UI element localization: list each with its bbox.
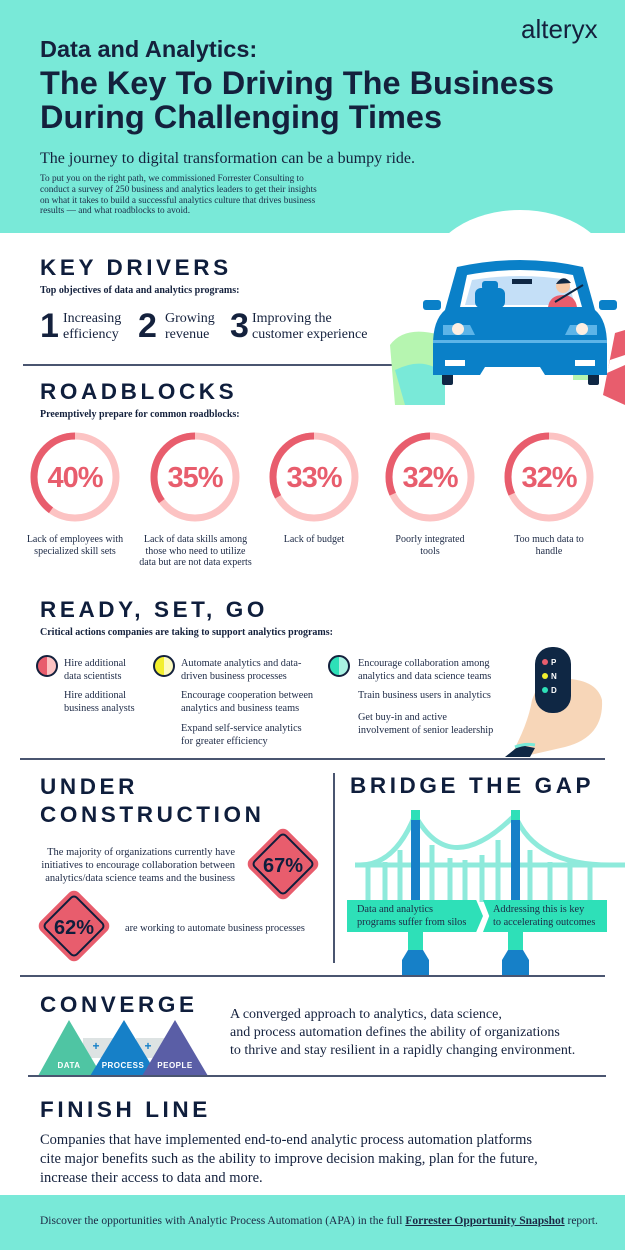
finish line text: cite major benefits such as the ability to improve decision making, plan for the future, (40, 1151, 538, 1167)
footer: Discover the opportunities with Analytic Process Automation (APA) in the full Forrester Opportunity Snapshot report. (40, 1215, 598, 1227)
title: Data and Analytics: (40, 36, 257, 62)
donut 32% b (508, 436, 590, 518)
text: 67% stat: The majority of organizations currently have initiatives to encourage collaboration between analytics/data science teams and the business (41, 847, 235, 884)
subheading: Top objectives of data and analytics programs: (40, 285, 239, 296)
intro text: To put you on the right path, we commissioned Forrester Consulting to (40, 174, 304, 184)
donut 33% (273, 436, 355, 518)
donut charts: 40% (47, 462, 104, 494)
actions column 2: Automate analytics and data- (181, 658, 301, 669)
intro text: conduct a survey of 250 business and analytics leaders to get their insights (40, 185, 317, 195)
finish line text (40, 1132, 538, 1186)
footer (0, 1195, 625, 1250)
heading: under construction: UNDER (40, 774, 138, 799)
decorative white bump (430, 210, 610, 330)
actions column 1: Hire additional (64, 690, 126, 701)
converge triangles: + (92, 1039, 100, 1053)
bridge label 1: programs suffer from silos (357, 917, 466, 928)
actions column 1: Hire additional (64, 658, 126, 669)
icon: hand with gear shifter (505, 647, 602, 757)
actions column 1: data scientists (64, 671, 121, 682)
subheading: Critical actions companies are taking to support analytics programs: (40, 627, 333, 638)
drivers list (40, 307, 367, 345)
title (40, 36, 554, 135)
roadblock labels: Too much data to handle (514, 534, 584, 556)
finish line text: Companies that have implemented end-to-end analytic process automation platforms (40, 1132, 532, 1148)
illustration: car (390, 260, 625, 405)
icon: hand with gear shifter: N (551, 672, 557, 681)
icon: hand with gear shifter: P (551, 658, 557, 667)
donut 35% (154, 436, 236, 518)
roadblock labels (27, 534, 584, 568)
actions column 3: involvement of senior leadership (358, 725, 493, 736)
title: During Challenging Times (40, 99, 442, 135)
actions column 2: driven business processes (181, 671, 287, 682)
heading: ready set go: READY, SET, GO (40, 597, 268, 622)
heading: converge: CONVERGE (40, 992, 198, 1017)
actions column 2 (153, 655, 313, 747)
drivers list: Growing (165, 311, 215, 326)
donut charts: 32% (402, 462, 459, 494)
actions column 3: analytics and data science teams (358, 671, 491, 682)
drivers list: 2 (138, 307, 157, 345)
converge triangles: PEOPLE (157, 1061, 193, 1070)
drivers list: 3 (230, 307, 249, 345)
intro text (40, 150, 415, 216)
actions column 3: Get buy-in and active (358, 712, 447, 723)
converge text: A converged approach to analytics, data science, (230, 1007, 502, 1022)
roadblock labels: Poorly integrated tools (395, 534, 465, 556)
actions column 2: analytics and business teams (181, 703, 299, 714)
bridge label 1: Data and analytics (357, 904, 433, 915)
intro text: on what it takes to build a successful analytics culture that drives business (40, 196, 315, 206)
converge text (230, 1007, 575, 1058)
text: 62% stat: are working to automate business processes (125, 923, 305, 934)
actions column 3 (328, 655, 493, 736)
converge text: to thrive and stay resilient in a rapidly changing environment. (230, 1043, 575, 1058)
converge triangles: PROCESS (102, 1061, 144, 1070)
diamond 67%: 67% (263, 855, 303, 877)
converge triangles: DATA (57, 1061, 81, 1070)
title: The Key To Driving The Business (40, 65, 554, 101)
bridge label 2: Addressing this is key (493, 904, 584, 915)
bridge label 2: to accelerating outcomes (493, 917, 595, 928)
actions column 1: business analysts (64, 703, 135, 714)
heading: key drivers: KEY DRIVERS (40, 255, 232, 280)
drivers list: customer experience (252, 327, 367, 342)
bridge label 1 (347, 900, 483, 932)
donut 32% (389, 436, 471, 518)
logo: alteryx (521, 14, 598, 44)
actions column 2: for greater efficiency (181, 736, 268, 747)
converge triangles: + (144, 1039, 152, 1053)
drivers list: revenue (165, 327, 209, 342)
converge text: and process automation defines the ability of organizations (230, 1025, 560, 1040)
actions column 2: Expand self-service analytics (181, 723, 302, 734)
drivers list: Increasing (63, 311, 121, 326)
drivers list: efficiency (63, 327, 119, 342)
roadblock labels: Lack of budget (284, 534, 344, 545)
donut charts: 35% (167, 462, 224, 494)
bridge illustration (355, 810, 625, 975)
donut charts: 32% (521, 462, 578, 494)
finish line text: increase their access to data and more. (40, 1170, 263, 1186)
heading: bridge the gap: BRIDGE THE GAP (350, 773, 594, 798)
roadblock labels: Lack of data skills among those who need to utilize data but are not data experts (139, 534, 252, 568)
heading: roadblocks: ROADBLOCKS (40, 379, 237, 404)
actions column 3: Train business users in analytics (358, 690, 491, 701)
intro text: The journey to digital transformation can be a bumpy ride. (40, 150, 415, 167)
donut 40% (34, 436, 116, 518)
heading: under construction (40, 774, 264, 827)
diamond 62%: 62% (54, 917, 94, 939)
drivers list: Improving the (252, 311, 332, 326)
actions column 2: Encourage cooperation between (181, 690, 313, 701)
intro text: results — and what roadblocks to avoid. (40, 206, 190, 216)
icon: hand with gear shifter: D (551, 686, 557, 695)
header band (0, 0, 625, 233)
actions column 3: Encourage collaboration among (358, 658, 490, 669)
diamond 67% (248, 828, 318, 900)
drivers list: 1 (40, 307, 59, 345)
subheading: Preemptively prepare for common roadblocks: (40, 409, 240, 420)
converge triangles (38, 1020, 208, 1075)
donut charts: 33% (286, 462, 343, 494)
heading: under construction: CONSTRUCTION (40, 802, 264, 827)
bridge label 2 (483, 900, 607, 932)
diamond 62% (38, 890, 110, 962)
donut charts (30, 432, 594, 522)
heading: finish line: FINISH LINE (40, 1097, 211, 1122)
roadblock labels: Lack of employees with specialized skill sets (27, 534, 123, 556)
actions column 1 (36, 655, 135, 714)
